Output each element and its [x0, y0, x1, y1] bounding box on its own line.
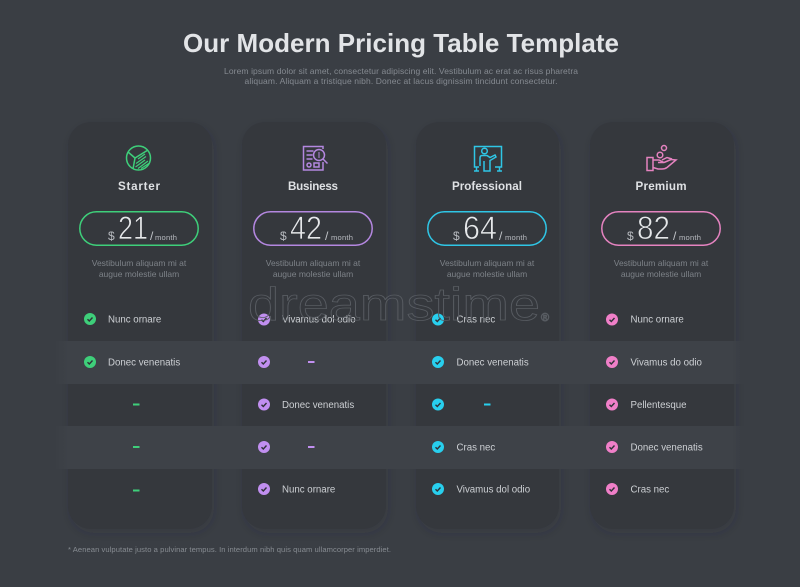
feature list: Nunc ornare	[282, 484, 335, 496]
feature list	[432, 314, 530, 496]
feature list: Donec venenatis	[456, 358, 529, 368]
price pill: /	[499, 229, 503, 243]
price pill	[428, 210, 546, 246]
price pill	[80, 210, 198, 246]
price pill: 64	[463, 210, 497, 246]
subtitle	[224, 66, 578, 86]
watermark: ®	[541, 312, 549, 324]
price pill: /	[325, 229, 329, 243]
plan name: Professional	[452, 180, 522, 193]
price pill	[602, 210, 720, 246]
description: augue molestie ullam	[273, 269, 353, 279]
title: Our Modern Pricing Table Template	[183, 28, 619, 58]
feature list: Vivamus do odio	[630, 358, 702, 368]
feature list: Cras nec	[456, 442, 495, 454]
subtitle: Lorem ipsum dolor sit amet, consectetur adipiscing elit. Vestibulum ac erat ac risus pharetra	[224, 66, 578, 76]
icon: report with magnifier	[304, 146, 328, 170]
feature list: Vivamus dol odio	[456, 484, 530, 496]
footnote: * Aenean vulputate justo a pulvinar tempus. In interdum nibh quis quam ullamcorper imperdiet.	[68, 545, 391, 554]
price pill: 21	[118, 210, 148, 246]
panel: Premium	[602, 146, 720, 496]
alternating table rows	[54, 341, 746, 469]
feature list: Pellentesque	[630, 400, 687, 411]
feature list: Donec venenatis	[108, 358, 180, 368]
price pill: /	[150, 229, 154, 243]
price pill: $	[280, 229, 287, 243]
description: augue molestie ullam	[621, 269, 701, 279]
price pill: $	[627, 229, 634, 243]
description	[266, 258, 361, 279]
feature list: Cras nec	[630, 484, 669, 496]
price pill: month	[155, 233, 177, 242]
icon: hand with coins	[647, 146, 676, 170]
feature list	[606, 314, 703, 496]
description: augue molestie ullam	[99, 269, 179, 279]
price pill: 82	[637, 210, 670, 246]
plan name: Premium	[636, 180, 686, 193]
feature list: Nunc ornare	[108, 314, 161, 326]
panel: Professional	[428, 146, 546, 496]
description: Vestibulum aliquam mi at	[266, 258, 361, 268]
feature list: Vivamus dol odio	[282, 314, 356, 326]
price pill: 42	[290, 210, 322, 246]
description: Vestibulum aliquam mi at	[92, 258, 187, 268]
feature list	[258, 314, 356, 496]
description: augue molestie ullam	[447, 269, 527, 279]
feature list: Nunc ornare	[630, 314, 684, 326]
description: Vestibulum aliquam mi at	[614, 258, 709, 268]
icon: presenter at board	[474, 146, 502, 171]
description	[440, 258, 535, 279]
description	[92, 258, 187, 279]
subtitle: aliquam. Aliquam a tristique nibh. Donec at lacus dignissim tincidunt consectetur.	[244, 76, 558, 86]
price pill: month	[679, 233, 701, 242]
panel: Starter	[80, 146, 198, 492]
feature list: Cras nec	[456, 314, 495, 326]
panel: Business	[254, 146, 372, 496]
description	[614, 258, 709, 279]
feature list	[84, 313, 180, 492]
price pill: /	[673, 229, 677, 243]
icon: pie chart	[126, 146, 150, 170]
description: Vestibulum aliquam mi at	[440, 258, 535, 268]
price pill	[254, 210, 372, 246]
price pill: month	[331, 233, 353, 242]
price pill: $	[453, 229, 460, 243]
feature list: Donec venenatis	[282, 400, 354, 411]
feature list: Donec venenatis	[630, 442, 703, 454]
plan name: Business	[288, 180, 338, 193]
watermark: dreamstime	[248, 278, 540, 330]
price pill: month	[505, 233, 527, 242]
plan name: Starter	[118, 180, 160, 193]
price pill: $	[108, 229, 115, 243]
pricing card backgrounds	[68, 122, 734, 529]
